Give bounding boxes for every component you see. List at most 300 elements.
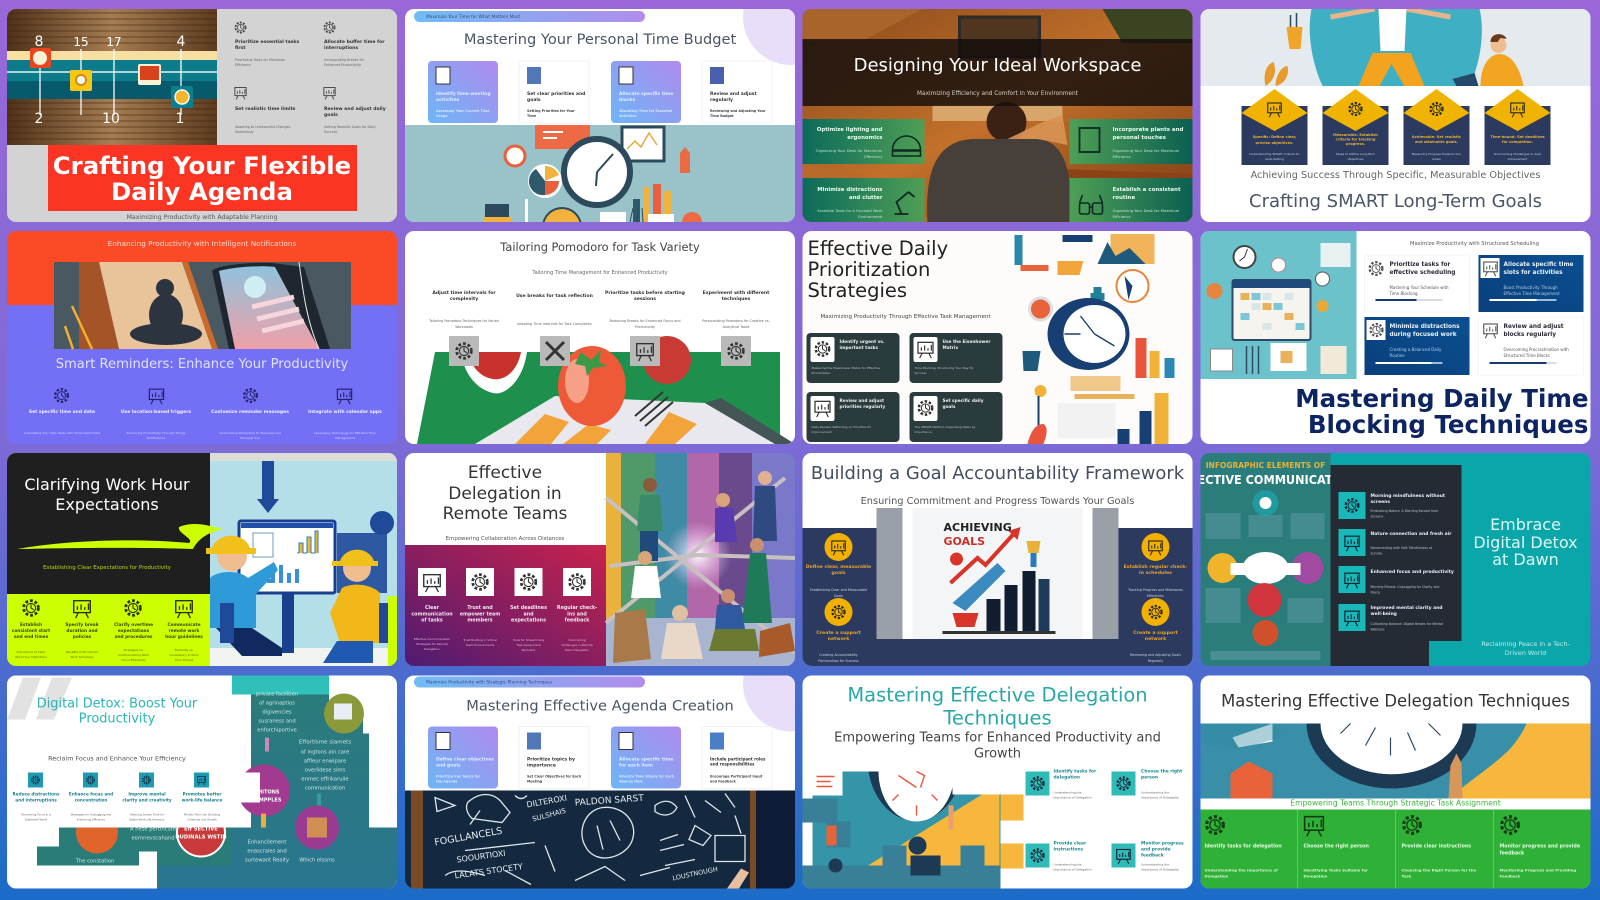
four agenda cards <box>428 726 772 788</box>
four agenda cards: for each item <box>619 762 653 768</box>
background infographic fragments: Enhancilement <box>248 840 286 846</box>
illustration: stopwatch and charts <box>1014 234 1174 444</box>
background infographic fragments: DUDINALS WSTIN <box>175 834 227 840</box>
accountability descriptions: Reviewing and Adjusting Goals <box>1130 653 1181 657</box>
SMART goal cards: Achievable: Set realistic <box>1412 135 1461 139</box>
four step cards: Allocating Time for Essential <box>619 109 672 113</box>
timeline image: 1 <box>176 111 184 127</box>
accountability descriptions: Regularly <box>1148 659 1163 663</box>
top tagline: Enhancing Productivity with Intelligent Notifications <box>108 239 297 248</box>
delegation labels: Regular check- <box>557 605 597 611</box>
green steps: Monitor progress and provide <box>1500 844 1581 850</box>
four step cards: Assessing Your Current Time <box>436 109 490 113</box>
SMART goal cards: Specific: Define clear, <box>1253 135 1296 139</box>
four step cards: Set clear priorities and <box>527 91 585 97</box>
green steps: Understanding the Importance of <box>1204 868 1278 872</box>
detox items: Nature connection and fresh air <box>1370 531 1452 537</box>
action descriptions: Consistency in Work <box>169 653 199 657</box>
subtitle: Empowering Teams for Enhanced Productivity and <box>834 730 1161 746</box>
benefit descriptions: Creativity and Growth <box>187 818 217 822</box>
SMART goal cards: Objectives <box>1348 157 1364 161</box>
benefit descriptions <box>21 812 220 822</box>
SMART goal cards: Measurable: Establish <box>1333 133 1378 137</box>
action descriptions: Importance of Clear <box>17 650 46 654</box>
gray icon tiles <box>449 336 751 366</box>
tip: lighting: Efficiency <box>864 154 883 159</box>
subtitle: Reclaim Focus and Enhance Your Efficiency <box>48 754 186 762</box>
delegation descriptions: Understanding the <box>1141 862 1169 866</box>
title: Embrace <box>1490 515 1561 534</box>
scheduling cards: slots for activities <box>1504 270 1563 276</box>
strategy cards: Daily Review: Reflecting on Priorities for <box>812 425 872 429</box>
title: Clarifying Work Hour <box>24 475 190 494</box>
illustration: chalkboard: LALATS STOCETY <box>454 862 524 880</box>
accountability descriptions: Creating Accountability <box>819 653 858 657</box>
panel: Crafting Your Flexible Daily Agenda <box>7 9 397 222</box>
benefit labels: and interruptions <box>15 798 57 802</box>
title: Digital Detox <box>1473 533 1578 552</box>
four agenda cards: importance <box>527 762 556 768</box>
illustration: clock and charts <box>405 125 795 222</box>
scheduling cards: Structured Time Blocks <box>1504 353 1550 358</box>
strategy cards: Identify urgent vs. <box>840 339 885 345</box>
timeline image: 2 <box>35 111 43 127</box>
reminder descriptions: Enhancing Productivity Through Timely <box>127 431 186 435</box>
action descriptions: Work Schedules <box>70 655 94 659</box>
panel: Smart Reminders <box>7 231 397 444</box>
detox items: Wellness <box>1370 628 1385 632</box>
reminder descriptions: Automating Your Daily Tasks with Smart Reminders <box>24 431 101 435</box>
delegation descriptions: Team Environments <box>465 643 495 647</box>
reminder icons <box>55 389 352 404</box>
agenda items text: Set realistic time limits <box>235 106 296 112</box>
green steps: Identify tasks for delegation <box>1204 844 1282 850</box>
workspace photo <box>802 9 1192 222</box>
scheduling cards: Minimize distractions <box>1390 324 1460 330</box>
tip: routine: Efficiency <box>1112 214 1132 219</box>
embedded infographic: ECTIVE COMMUNICAT <box>1198 472 1333 487</box>
delegation icons <box>418 568 591 596</box>
action labels: and end times <box>14 634 49 640</box>
agenda items text: Success <box>324 130 338 134</box>
strategy cards: Time Blocking: Structuring Your Day for <box>914 366 974 370</box>
detox items: Morning Rituals: Unplugging for Clarity and <box>1370 585 1439 589</box>
dark panel <box>1330 465 1462 666</box>
subtitle: Maximizing Efficiency and Comfort in Your Environment <box>917 91 1079 97</box>
column headings: complexity <box>450 296 478 302</box>
detox items: Cultivating Balance: Digital Breaks for Mental <box>1370 622 1443 626</box>
strategy cards: Review and adjust <box>840 398 884 404</box>
tip: distractions: Minimize distractions <box>817 187 882 193</box>
title: Techniques <box>942 706 1052 730</box>
illustration: tangled team <box>606 453 795 666</box>
detox items: Improved mental clarity and <box>1370 605 1443 611</box>
tip: plants: Efficiency <box>1112 154 1132 159</box>
title: Effective Daily <box>808 237 948 260</box>
four step cards <box>428 61 772 123</box>
SMART goal cards: Overcoming Challenges in Goal <box>1494 152 1541 156</box>
title: Digital Detox: Boost Your <box>37 696 198 712</box>
tip: lighting: ergonomics <box>847 135 882 141</box>
green steps: Feedback <box>1500 874 1521 878</box>
panel: Mastering Effective Delegation Techniques (green) <box>1200 676 1590 888</box>
SMART goal cards: Goals <box>1432 157 1441 161</box>
four step cards: Usage <box>436 114 448 118</box>
four agenda cards: and goals <box>436 762 461 768</box>
column headings: Prioritize tasks before starting <box>605 290 685 296</box>
background infographic fragments: Eff SECTIVE <box>184 826 218 832</box>
four agenda cards: Include participant roles <box>710 756 766 762</box>
column descriptions: Balancing Breaks for Enhanced Focus and <box>609 319 681 323</box>
four step cards: Activities <box>619 114 636 118</box>
green steps <box>1200 810 1590 888</box>
panel: Mastering Effective Agenda Creation <box>405 636 839 888</box>
tip: plants: Incorporate plants and <box>1112 127 1184 133</box>
benefit descriptions: Distracted World <box>25 818 48 822</box>
four agenda cards: and responsibilities <box>710 762 755 766</box>
delegation labels <box>1054 768 1184 858</box>
action descriptions: Benefits of Structured <box>66 650 98 654</box>
illustration: chalkboard: LOUSTNOUGH <box>672 865 719 882</box>
delegation labels: and provide <box>1141 846 1171 852</box>
panel: Mastering Effective Delegation Techniques (teal) <box>802 676 1192 888</box>
scheduling cards: effective scheduling <box>1390 270 1455 276</box>
background infographic fragments: digivencies <box>262 710 292 716</box>
background infographic fragments: affleur enwipare <box>304 758 346 764</box>
four step cards: Setting Priorities for Your <box>527 109 575 113</box>
SMART goal cards: Time-bound: Set deadlines <box>1490 135 1545 139</box>
four step cards: regularly <box>710 97 733 103</box>
four agenda cards: Encourage Participant Input <box>710 774 763 778</box>
action descriptions: Hour Policies <box>175 658 194 662</box>
four agenda cards: Prioritize Key Topics for <box>436 774 481 778</box>
accountability labels: in schedules <box>1139 570 1172 576</box>
delegation labels <box>411 605 597 624</box>
subtitle: Growth <box>974 746 1021 762</box>
panel: Mastering Daily Time Blocking Techniques <box>1200 231 1590 444</box>
accountability labels: Create a support <box>816 630 862 636</box>
delegation labels: of tasks <box>421 618 443 624</box>
subtitle: Maximizing Productivity with Adaptable Planning <box>127 214 277 221</box>
background infographic fragments: WHITONS <box>252 790 280 796</box>
column headings: sessions <box>634 296 656 302</box>
timeline image: 8 <box>35 34 43 50</box>
strategy cards: Set specific daily <box>942 398 984 404</box>
background infographic fragments: of agrinaptios <box>259 700 295 706</box>
subtitle: Achieving Success Through Specific, Measurable Objectives <box>1251 170 1540 181</box>
delegation descriptions: Understanding the <box>1141 790 1169 794</box>
agenda items text: interruptions <box>324 45 358 51</box>
subtitle: Establishing Clear Expectations for Productivity <box>43 565 172 571</box>
accountability labels: Define clear, measurable <box>806 564 871 570</box>
tip: lighting: Organizing Your Desk for Maximum <box>816 148 883 153</box>
agenda items text: Allocate buffer time for <box>324 39 385 45</box>
scheduling cards: blocks regularly <box>1504 332 1556 338</box>
benefit descriptions: Strategies for Unplugging and <box>71 812 112 816</box>
accountability labels: Create a support <box>1133 630 1179 636</box>
column descriptions: Workloads <box>455 325 473 329</box>
background infographic fragments: Which elssms <box>299 858 335 864</box>
agenda items text: Enhanced Productivity <box>324 63 361 67</box>
reminder labels: Use location-based triggers <box>121 409 191 415</box>
column descriptions: Tailoring Pomodoro Techniques for Varied <box>428 319 499 323</box>
delegation descriptions: Task Assignment <box>515 643 541 647</box>
four agenda cards: Define clear objectives <box>436 756 494 762</box>
illustration: chalkboard: DILTEROXI <box>526 793 568 809</box>
title: Strategies <box>808 279 907 302</box>
lime brush stroke <box>17 524 223 549</box>
agenda items text: Setting Realistic Goals for Daily <box>324 125 376 129</box>
delegation descriptions: Trust Building in Virtual <box>462 638 497 642</box>
delegation descriptions: Delegation <box>424 647 440 651</box>
delegation descriptions: Team Delegation <box>564 648 589 652</box>
background infographic fragments: eornnevscahand <box>131 836 175 842</box>
tip: plants: Organizing Your Desk for Maximum <box>1112 148 1180 153</box>
accountability descriptions: Establishing Clear and Measurable <box>810 588 867 592</box>
four agenda cards: Prioritize topics by <box>527 756 575 762</box>
tagline pill: Maximize Your Time for What Matters Most <box>426 14 520 20</box>
delegation labels: Monitor progress <box>1141 840 1184 846</box>
illustration: chalkboard: SOOURTIOXI <box>456 849 506 864</box>
benefit descriptions: Enhancing Efficiency <box>77 818 105 822</box>
accountability labels: Establish regular check- <box>1124 564 1187 570</box>
accountability labels: goals <box>831 570 846 576</box>
green steps: Choose the right person <box>1304 844 1369 850</box>
action labels: expectations <box>118 628 150 634</box>
title: Tailoring Pomodoro for Task Variety <box>499 240 700 254</box>
action labels: Communicate <box>167 622 201 628</box>
strategy cards: priorities regularly <box>840 404 885 410</box>
timeline image: 15 <box>73 35 89 49</box>
background infographic fragments <box>37 676 397 888</box>
title: Mastering Effective Agenda Creation <box>466 698 734 714</box>
subtitle: Tailoring Time Management for Enhanced Productivity <box>531 270 668 276</box>
column descriptions: Adapting Time Intervals for Task Complexity <box>517 322 592 326</box>
background infographic fragments: private facilitien <box>256 692 298 698</box>
reminder labels: Set specific time and date <box>29 409 95 415</box>
benefit descriptions: Detoxing Screen Time for <box>130 812 165 816</box>
scheduling cards <box>1364 255 1584 375</box>
four step cards: Reviewing and Adjusting Your <box>710 109 766 113</box>
four agenda cards: Agenda Item <box>619 780 643 784</box>
delegation descriptions <box>1054 790 1179 872</box>
accountability descriptions: Goals <box>834 594 843 598</box>
agenda items text: first <box>235 45 246 51</box>
action labels: Clarify overtime <box>114 622 153 628</box>
action labels: and procedures <box>115 634 153 640</box>
benefit descriptions: Mindful Tech Use: Boosting <box>184 812 220 816</box>
delegation labels: delegation <box>1054 774 1080 780</box>
delegation labels: and <box>523 612 534 618</box>
four step cards: goals <box>527 97 541 103</box>
strategy cards: important tasks <box>840 345 879 351</box>
green steps: Delegation <box>1304 874 1328 878</box>
tagline pill: Maximize Productivity with Strategic Planning Techniques <box>426 680 553 686</box>
panel: Embrace Digital Detox at Dawn <box>1198 453 1590 666</box>
four step cards: Identify time-wasting <box>436 91 491 97</box>
subtitle: Empowering Collaboration Across Distances <box>446 536 565 542</box>
title: Mastering Your Personal Time Budget <box>464 31 736 48</box>
title: Designing Your Ideal Workspace <box>854 55 1141 76</box>
delegation descriptions: Understanding the <box>1054 862 1082 866</box>
strategy cards <box>806 333 1002 442</box>
delegation labels: expectations <box>511 618 546 624</box>
strategy cards: Importance <box>914 430 932 434</box>
action descriptions <box>15 648 199 662</box>
benefit labels: Promotes better <box>183 792 222 796</box>
benefit labels: concentration <box>75 798 107 802</box>
tip: routine <box>1070 178 1192 222</box>
benefit labels: Improve mental <box>128 792 166 796</box>
scheduling cards: during focused work <box>1390 332 1457 338</box>
delegation labels: person <box>1141 774 1158 780</box>
column descriptions: Personalizing Pomodoro for Creative vs. <box>702 319 770 323</box>
timeline image: 10 <box>102 111 120 127</box>
reminder descriptions: Personal Use <box>240 436 260 440</box>
delegation labels: Identify tasks for <box>1054 768 1097 774</box>
four step cards: Time <box>527 114 537 118</box>
four step cards: Review and adjust <box>710 91 757 97</box>
four agenda cards: Allocate Time Wisely for Each <box>619 774 675 778</box>
green steps: Provide clear instructions <box>1402 844 1471 850</box>
SMART goal cards: Understanding SMART Criteria for <box>1249 152 1300 156</box>
strategy cards: The ABCDE Method: Organizing Tasks by <box>914 425 976 429</box>
illustration: engineers at board <box>206 453 397 666</box>
action labels: Specify break <box>65 622 99 628</box>
four agenda cards: Set Clear Objectives for Each <box>527 774 582 778</box>
white text block <box>7 676 232 828</box>
strategy cards: Prioritization <box>812 371 830 375</box>
action labels: remote work <box>169 628 200 634</box>
title: Mastering Daily Time <box>1295 384 1588 413</box>
four agenda cards: Meeting <box>527 780 543 784</box>
benefit icons <box>28 772 209 788</box>
tip: routine: Organizing Your Desk for Maximum <box>1112 208 1180 213</box>
benefit labels: work-life balance <box>182 798 223 802</box>
delegation labels: communication <box>411 612 453 618</box>
detox items: Screens <box>1370 514 1383 518</box>
SMART goal cards: criteria for tracking <box>1336 138 1376 142</box>
panel: Clarifying Work Hour Expectations <box>7 453 397 666</box>
delegation tiles <box>1026 772 1136 868</box>
title: Crafting SMART Long-Term Goals <box>1249 191 1542 212</box>
illustration: chalkboard: PALDON SARST <box>575 794 645 808</box>
detox items: Embracing Nature: A Morning Escape from <box>1370 509 1438 513</box>
tip: lighting: Optimize lighting and <box>817 127 883 133</box>
item icons <box>235 22 335 99</box>
column descriptions <box>429 320 770 328</box>
accountability icons <box>824 533 1170 626</box>
delegation labels: empower team <box>460 612 500 618</box>
background infographic fragments: Effortisme siamets <box>299 740 351 746</box>
title: Smart Reminders: Enhance Your Productivity <box>56 357 349 372</box>
reminder labels <box>29 410 382 414</box>
agenda items text: goals <box>324 112 338 118</box>
tip: lighting <box>802 119 924 164</box>
column descriptions: Analytical Tasks <box>723 325 750 329</box>
title <box>37 696 198 726</box>
delegation labels: Clear <box>425 605 440 611</box>
background infographic fragments: of ingtons ain care <box>301 750 349 756</box>
title <box>1473 515 1578 569</box>
central image: achieving goals: GOALS <box>944 535 985 548</box>
accountability labels: network <box>828 636 850 642</box>
scheduling cards: Time Blocking <box>1388 291 1418 296</box>
detox items: well-being <box>1370 611 1397 617</box>
scheduling cards: Routine <box>1390 353 1405 358</box>
title <box>443 463 568 524</box>
SMART goal cards <box>1242 89 1550 165</box>
panel: Mastering Your Personal Time Budget <box>405 9 795 222</box>
SMART goal cards: Measuring Progress Towards Your <box>1412 152 1462 156</box>
title <box>24 475 190 514</box>
delegation labels: members <box>467 618 493 624</box>
delegation descriptions: Importance of Delegation <box>1141 796 1179 800</box>
reminder descriptions: Management <box>335 436 356 440</box>
background infographic fragments: GOMPPLES <box>251 798 282 804</box>
reminder labels: Integrate with calendar apps <box>308 409 382 415</box>
detox items: Sunrise <box>1370 552 1382 556</box>
delegation labels: Trust and <box>467 605 493 611</box>
delegation descriptions: Importance of Delegation <box>1054 868 1092 872</box>
subtitle: Maximizing Productivity Through Effective Task Management <box>820 314 991 320</box>
column headings: techniques <box>722 296 751 302</box>
reminder labels: Customize reminder messages <box>211 409 289 415</box>
background infographic fragments: surtewant Realty <box>245 858 289 864</box>
delegation descriptions: Importance of Delegation <box>1054 796 1092 800</box>
title <box>1295 384 1588 439</box>
column headings: Use breaks for task reflection <box>516 293 593 299</box>
subtitle: Driven World <box>1505 649 1546 657</box>
delegation descriptions: Remotely <box>522 648 536 652</box>
four agenda cards: and Feedback <box>710 780 737 784</box>
SMART goal cards: progress. <box>1346 142 1365 146</box>
strategy cards: Matrix <box>942 345 958 351</box>
title: Remote Teams <box>443 504 568 524</box>
panel: Crafting SMART Long-Term Goals <box>1200 9 1590 222</box>
title: at Dawn <box>1492 550 1559 569</box>
SMART goal cards: for completion. <box>1502 140 1533 144</box>
title: Prioritization <box>808 258 930 281</box>
column headings <box>432 290 770 301</box>
title: Effective <box>468 463 542 483</box>
action labels: consistent start <box>12 628 50 634</box>
panel: Digital Detox: Boost Your Productivity <box>7 676 397 888</box>
timeline image: 17 <box>106 35 122 49</box>
panel: Designing Your Ideal Workspace <box>802 9 1192 222</box>
four step cards: blocks <box>619 97 636 103</box>
delegation labels: feedback <box>1141 852 1164 858</box>
strategy cards: Mastering the Eisenhower Matrix for Effective <box>812 366 880 370</box>
background infographic fragments: enforchiportive <box>257 728 297 734</box>
timeline image <box>7 9 217 145</box>
strategy cards: Improvement <box>812 430 833 434</box>
SMART goal cards: Achievement <box>1508 157 1528 161</box>
dark title band <box>802 39 1192 106</box>
reminder descriptions: Customizing Reminders for Business and <box>219 431 281 435</box>
agenda items text: Review and adjust daily <box>324 106 386 112</box>
tip: plants: personal touches <box>1112 135 1167 141</box>
scheduling cards: Prioritize tasks for <box>1390 262 1450 268</box>
action descriptions: Communicating Work <box>118 653 149 657</box>
action icons <box>24 601 192 618</box>
tip: distractions: and clutter <box>849 195 883 201</box>
agenda items text: Incorporating Breaks for <box>324 58 365 62</box>
accountability descriptions <box>810 588 1183 663</box>
scheduling cards: Effective Time Management <box>1504 291 1560 296</box>
delegation descriptions: Tools for Streamlining <box>512 638 544 642</box>
tagline pill <box>414 676 645 688</box>
